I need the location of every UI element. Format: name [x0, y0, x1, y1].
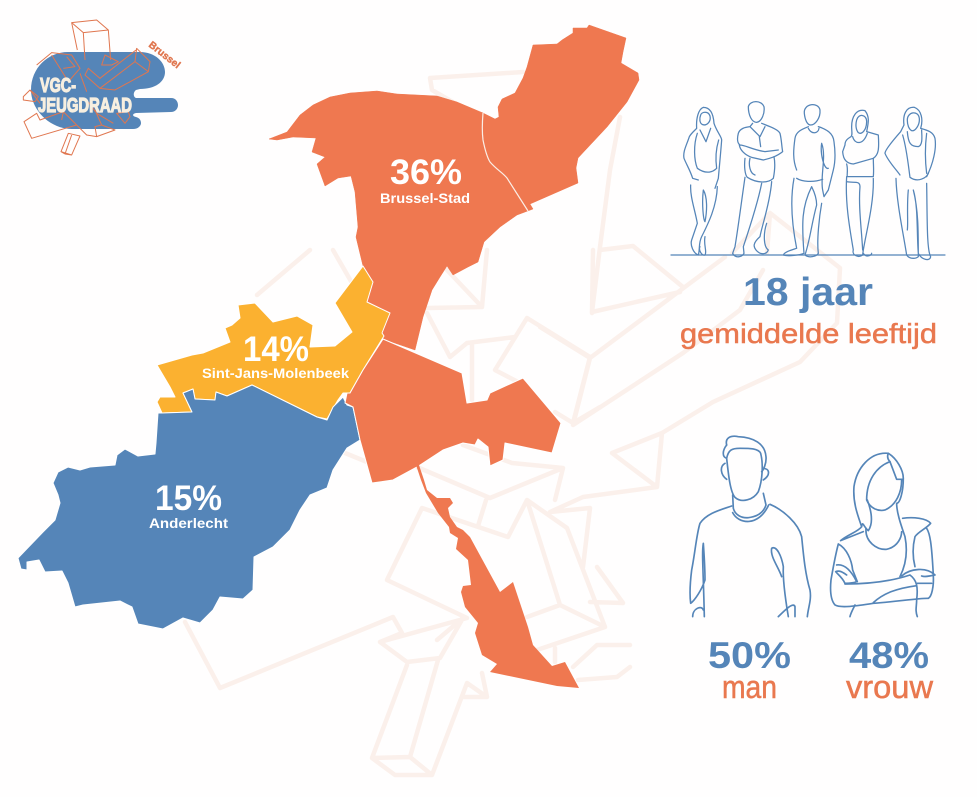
figure 3 [783, 105, 835, 257]
logo wordmark [38, 75, 132, 117]
label: 15% Anderlecht: Anderlecht [149, 516, 229, 531]
logo: VGC-Jeugdraad Brussel [23, 20, 182, 155]
illustration: woman [831, 453, 935, 617]
figure 2 [733, 102, 783, 257]
logo wordmark: JEUGDRAAD [38, 95, 132, 117]
map region: Sint-Jans-Molenbeek [157, 266, 390, 419]
logo label Brussel: Brussel [146, 40, 182, 71]
stat: 18 jaar gemiddelde leeftijd: 18 jaar [743, 271, 873, 314]
stat: 48% vrouw: 48% [849, 635, 929, 676]
stat: 48% vrouw: vrouw [846, 669, 934, 705]
illustration: man [690, 436, 810, 617]
figure 4 [843, 110, 879, 256]
label: 14% Sint-Jans-Molenbeek [202, 330, 350, 381]
label: 36% Brussel-Stad: 36% [390, 153, 462, 192]
stat: 18 jaar gemiddelde leeftijd: gemiddelde leeftijd [680, 318, 937, 349]
label: 14% Sint-Jans-Molenbeek: 14% [243, 330, 309, 369]
stat: 18 jaar gemiddelde leeftijd [680, 271, 937, 349]
figure 1 [684, 107, 722, 255]
stat: 50% man [708, 635, 791, 705]
label: 36% Brussel-Stad: Brussel-Stad [380, 191, 470, 206]
stat: 48% vrouw [846, 635, 934, 705]
stat: 50% man: 50% [708, 635, 791, 676]
label: 15% Anderlecht [149, 479, 229, 531]
map region: Brussel-Stad north and centre [269, 25, 639, 350]
stat: 50% man: man [722, 669, 777, 705]
label: 36% Brussel-Stad [380, 153, 470, 206]
map region: Anderlecht [18, 385, 360, 629]
map: Brussels districts [18, 25, 639, 688]
map region: Brussel-Stad centre block [345, 339, 561, 483]
map region: Brussel-Stad south strip [416, 465, 579, 688]
logo wireframe blocks [23, 20, 150, 155]
label: 15% Anderlecht: 15% [155, 479, 222, 518]
figure 5 [885, 107, 935, 260]
logo blob [31, 52, 178, 129]
illustration: group of five young people [671, 102, 945, 260]
logo wordmark: VGC- [40, 75, 76, 97]
label: 14% Sint-Jans-Molenbeek: Sint-Jans-Molenbeek [202, 366, 350, 381]
